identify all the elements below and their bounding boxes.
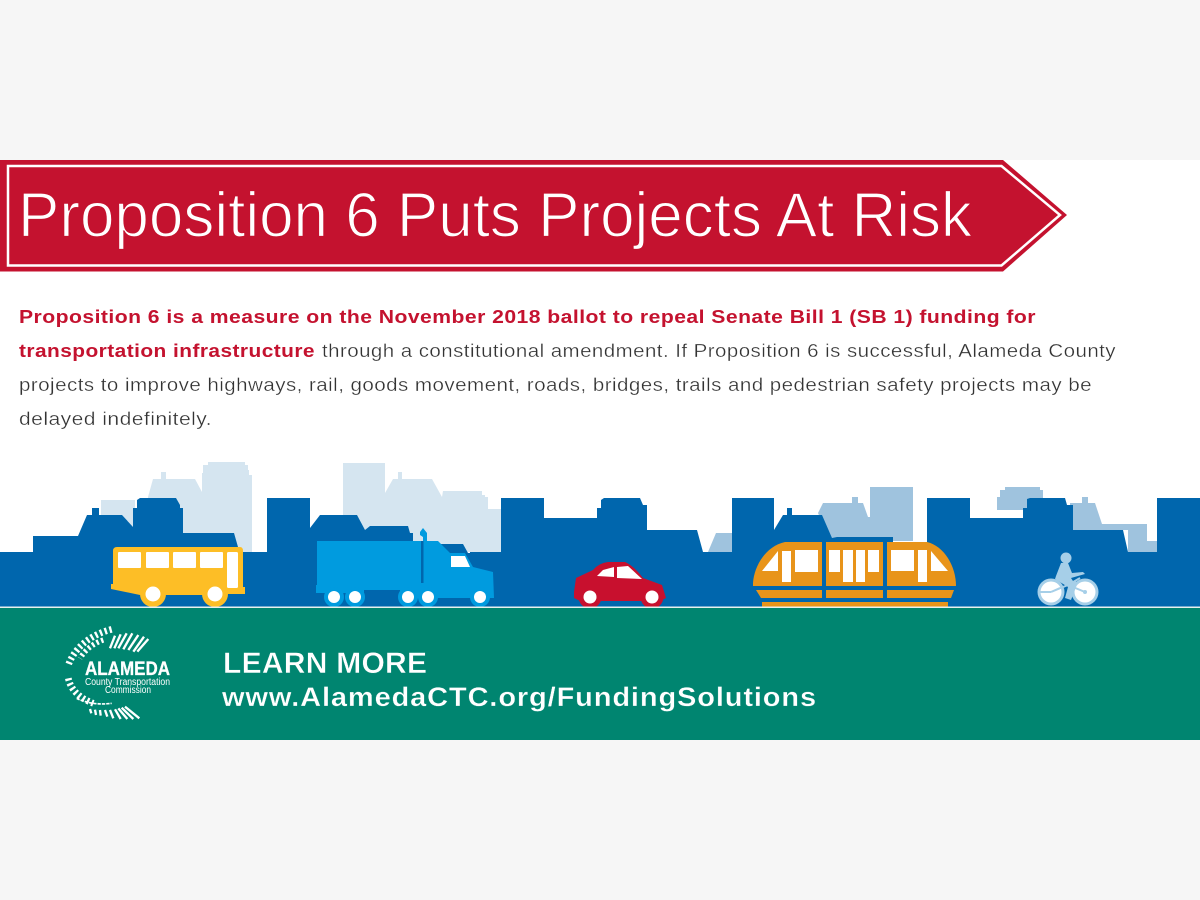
banner arrow shape <box>0 160 1067 272</box>
logo: Alameda CTC: County Transportation <box>85 677 170 688</box>
mid-tone background buildings <box>708 487 1157 552</box>
icon: cyclist <box>1038 552 1098 606</box>
call to action <box>221 647 817 712</box>
intro paragraph: delayed indefinitely. <box>19 408 212 429</box>
white content panel <box>0 160 1200 740</box>
icon: school bus <box>111 547 245 607</box>
intro paragraph <box>19 306 1116 429</box>
intro paragraph: transportation infrastructure <box>19 340 315 361</box>
pale background buildings <box>101 462 501 552</box>
footer band <box>0 608 1200 740</box>
call to action: LEARN MORE <box>223 647 427 680</box>
city skyline <box>0 462 1200 607</box>
icon: light rail train <box>753 542 956 606</box>
icon: red car <box>574 562 666 608</box>
logo: Alameda CTC: Commission <box>105 685 151 696</box>
icon: delivery truck <box>316 528 494 607</box>
intro paragraph: through a constitutional amendment. If Proposition 6 is successful, Alameda County <box>322 340 1116 361</box>
title banner <box>0 160 1067 272</box>
call to action: www.AlamedaCTC.org/FundingSolutions <box>221 682 817 712</box>
intro paragraph: Proposition 6 is a measure on the November 2018 ballot to repeal Senate Bill 1 (SB 1) funding for <box>19 306 1036 327</box>
intro paragraph: projects to improve highways, rail, goods movement, roads, bridges, trails and pedestrian safety projects may be <box>19 374 1092 395</box>
dark foreground buildings <box>0 498 1200 607</box>
road line <box>0 606 1200 608</box>
logo: Alameda CTC <box>68 629 170 719</box>
title: Proposition 6 Puts Projects At Risk <box>18 180 972 250</box>
logo wordmark: ALAMEDA <box>85 658 170 680</box>
